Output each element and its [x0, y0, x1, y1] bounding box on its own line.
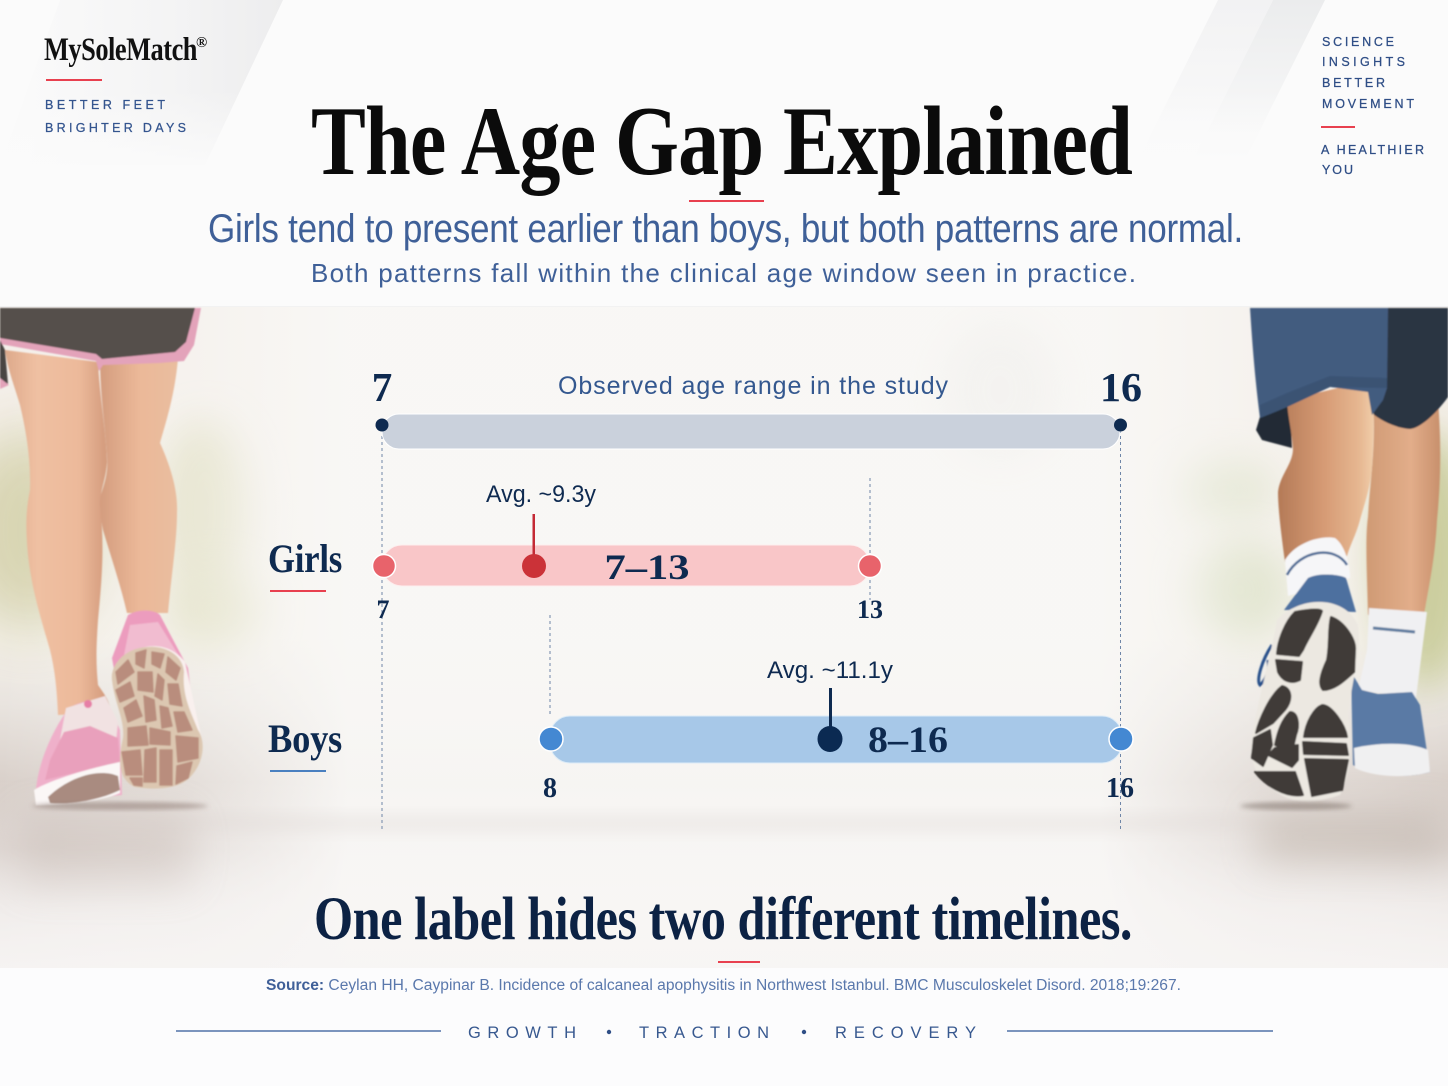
secondary subtitle: Both patterns fall within the clinical age window seen in practice. [311, 258, 1136, 288]
top-right tagline [1321, 35, 1424, 177]
shoe upper [1284, 575, 1356, 612]
shorts inner [1256, 400, 1292, 448]
footer strip [176, 1024, 1273, 1042]
top-right tagline: BETTER [1322, 76, 1385, 90]
observed range bar [372, 364, 1142, 449]
shoe sole [1251, 602, 1359, 801]
top-right tagline: SCIENCE [1322, 35, 1394, 49]
footer panel [0, 968, 1448, 1086]
sock [1285, 537, 1350, 596]
header panel [0, 0, 1448, 307]
back shoe [1351, 672, 1430, 776]
front shorts [1250, 308, 1388, 418]
source citation: Source: Ceylan HH, Caypinar B. Incidence of calcaneal apophysitis in Northwest Istanbul. BMC Musculoskelet Disord. 2018;19:267. [266, 977, 1181, 994]
title: The Age Gap Explained [311, 87, 1132, 196]
boys row: 8 [543, 773, 557, 804]
observed range bar: 7 [372, 364, 392, 410]
girls row [268, 481, 883, 624]
tagline [45, 98, 186, 135]
observed range bar: Observed age range in the study [558, 372, 948, 400]
tagline: BRIGHTER DAYS [45, 121, 186, 135]
photo background [0, 307, 1448, 968]
boys row: Avg. ~11.1y [767, 657, 893, 684]
logo block [44, 32, 207, 135]
top-right tagline: MOVEMENT [1322, 97, 1414, 111]
footer strip: RECOVERY [835, 1024, 976, 1042]
back leg [1366, 400, 1440, 615]
shorts [0, 308, 201, 371]
boys row [268, 657, 1134, 804]
front leg [1278, 380, 1374, 562]
far leg [100, 358, 178, 613]
girls row: 7–13 [604, 547, 690, 587]
takeaway headline: One label hides two different timelines. [314, 886, 1132, 953]
far shoe upper [112, 610, 197, 760]
near shoe [36, 700, 122, 802]
girls row: Girls [268, 536, 342, 581]
photo: girl's legs with pink shoes [0, 308, 208, 810]
registered mark: ® [196, 35, 207, 51]
top-right tagline: A HEALTHIER [1321, 143, 1424, 157]
near leg [5, 350, 111, 715]
girls row: Avg. ~9.3y [486, 481, 596, 508]
photo: man's legs with blue shoes [1240, 308, 1448, 810]
back shorts [1372, 308, 1448, 429]
footer strip: GROWTH [468, 1024, 576, 1042]
far shoe lugs [116, 650, 198, 786]
tagline: BETTER FEET [45, 98, 165, 112]
chart: age timeline [268, 364, 1142, 830]
boys row: 8–16 [868, 720, 948, 761]
boys row: 16 [1106, 773, 1134, 804]
observed range bar: 16 [1100, 364, 1142, 410]
footer strip: TRACTION [639, 1024, 769, 1042]
girls row: 7 [376, 595, 390, 624]
shoe lugs [1252, 609, 1355, 796]
girls row: 13 [857, 595, 883, 624]
lace [1259, 645, 1272, 685]
back sock [1358, 608, 1427, 698]
subtitle: Girls tend to present earlier than boys, but both patterns are normal. [208, 207, 1243, 251]
brand name: MySoleMatch [44, 32, 197, 68]
boys row: Boys [268, 716, 342, 761]
far shoe sole [112, 647, 203, 789]
top-right tagline: INSIGHTS [1322, 55, 1405, 69]
top-right tagline: YOU [1322, 163, 1353, 177]
